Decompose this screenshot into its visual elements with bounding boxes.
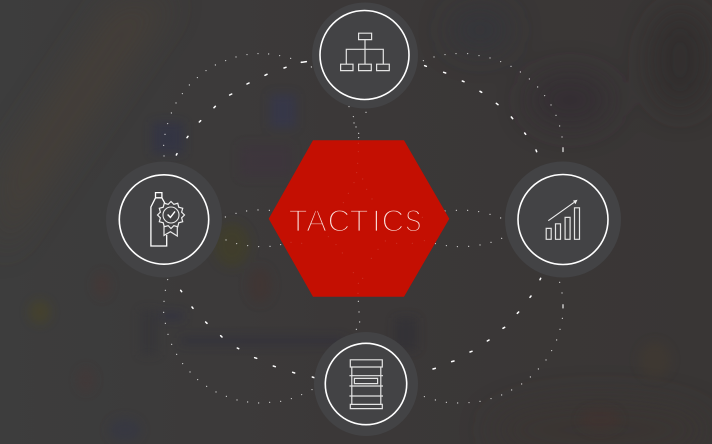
node: right, growth chart (505, 162, 621, 278)
dashed connector: right to bottom, inner arc (433, 278, 541, 369)
icon: rising bar chart with arrow (546, 200, 580, 239)
icon: bottle with quality badge (151, 193, 184, 246)
node: bottom, store shelf (314, 332, 418, 436)
dotted connector: hexagon to bottom node (356, 301, 360, 329)
dotted connector: top node to hexagon (349, 107, 366, 138)
dashed connector: left to bottom, inner arc (181, 290, 314, 378)
central hexagon (269, 140, 449, 297)
dotted connector: left to bottom, outer arc (164, 280, 312, 403)
node: left, certified bottle (106, 162, 222, 278)
dotted connector: left node to hexagon (225, 210, 281, 247)
dashed connector: top to right, inner arc (425, 66, 537, 152)
dotted connector: top to left, outer arc (164, 54, 311, 156)
dashed connector: top to left, inner arc (176, 62, 306, 155)
dotted connector: top to right, outer arc (423, 54, 563, 152)
hexagon title: S (405, 202, 422, 238)
icon: organisation chart (341, 33, 389, 71)
hexagon title: TACTIC (288, 202, 404, 238)
faint dotted lines inside hexagon (291, 143, 424, 293)
dotted connector: hexagon to right node (435, 210, 502, 247)
node: top, organisation chart (312, 2, 418, 108)
icon: store shelf (349, 360, 383, 409)
dotted connector: right to bottom, outer arc (424, 282, 563, 403)
